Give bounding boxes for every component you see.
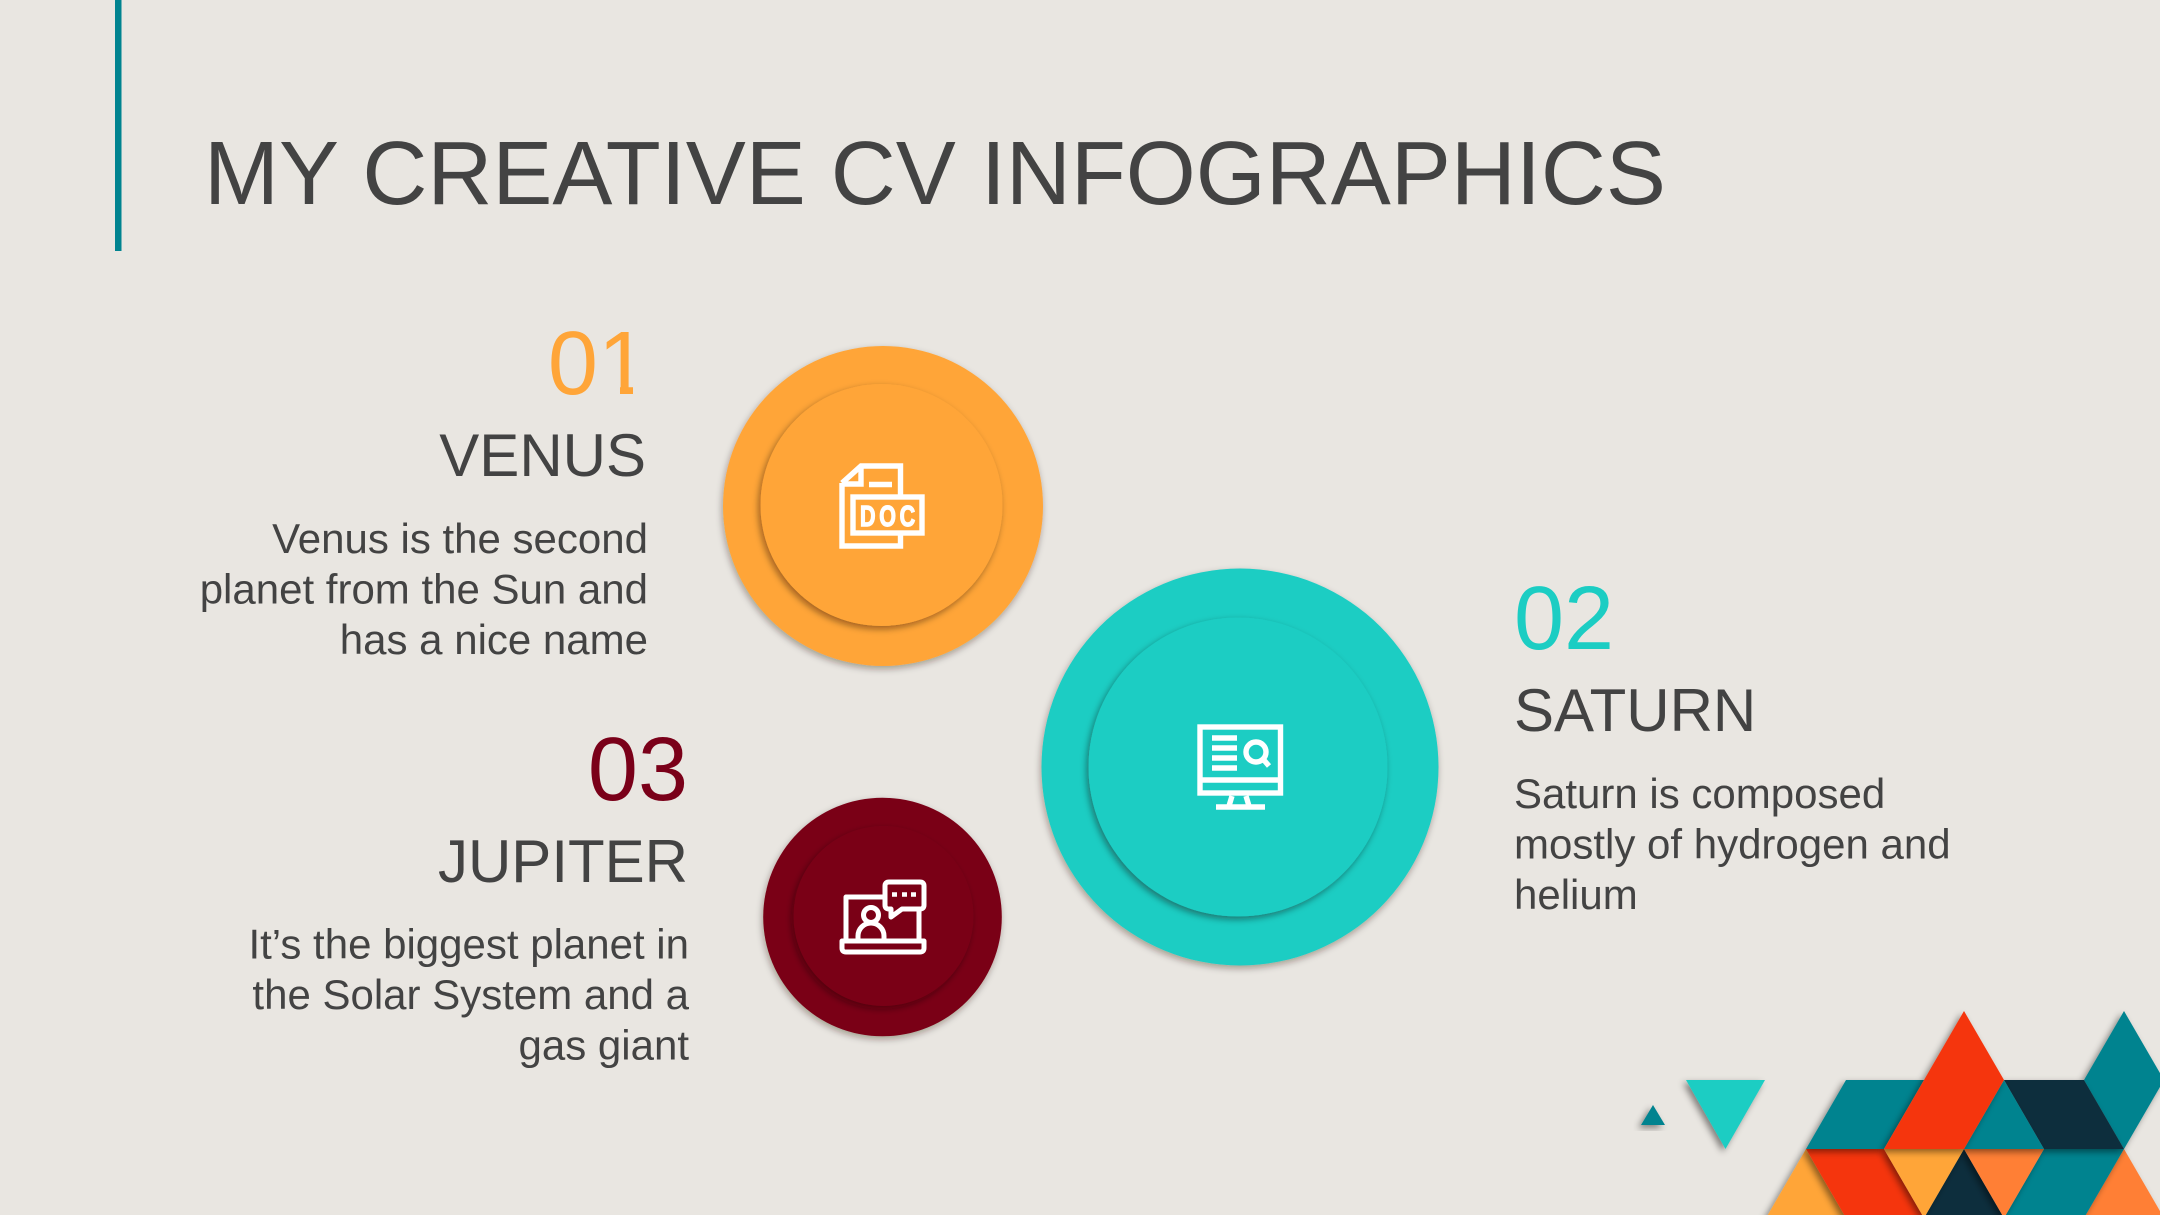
description: jupiter: It’s the biggest planet in	[248, 920, 689, 968]
icon: doc file	[842, 466, 922, 546]
panel: venus text	[200, 314, 648, 663]
description: jupiter: gas giant	[519, 1022, 689, 1068]
decorative triangle: aqua	[1686, 1080, 1765, 1149]
description: venus: planet from the Sun and	[200, 566, 648, 612]
circle: saturn	[1042, 568, 1438, 966]
heading: venus: VENUS	[439, 422, 646, 489]
heading: saturn: SATURN	[1514, 677, 1756, 744]
title: MY CREATIVE CV INFOGRAPHICS	[204, 124, 1666, 224]
panel: saturn text	[1514, 569, 1951, 918]
accent bar	[115, 0, 122, 251]
circle: venus	[723, 346, 1043, 666]
description: venus: has a nice name	[340, 616, 648, 663]
circle: jupiter	[763, 798, 1002, 1036]
description: jupiter: the Solar System and a	[252, 971, 690, 1018]
icon: monitor with search	[1200, 727, 1280, 807]
decorative triangle: small teal	[1641, 1105, 1665, 1125]
icon: doc file: DOC	[860, 501, 919, 533]
triangle mosaic	[1766, 1011, 2160, 1215]
description: saturn: helium	[1514, 871, 1638, 918]
panel: jupiter text	[248, 720, 690, 1068]
number 02: 02	[1514, 569, 1614, 669]
heading: jupiter: JUPITER	[438, 828, 688, 895]
number 03: 03	[588, 720, 688, 820]
icon: laptop with person and chat	[842, 882, 924, 952]
description: venus: Venus is the second	[272, 515, 648, 562]
description: saturn: mostly of hydrogen and	[1514, 820, 1951, 868]
description: saturn: Saturn is composed	[1514, 770, 1885, 817]
number 01: 01	[548, 314, 648, 414]
